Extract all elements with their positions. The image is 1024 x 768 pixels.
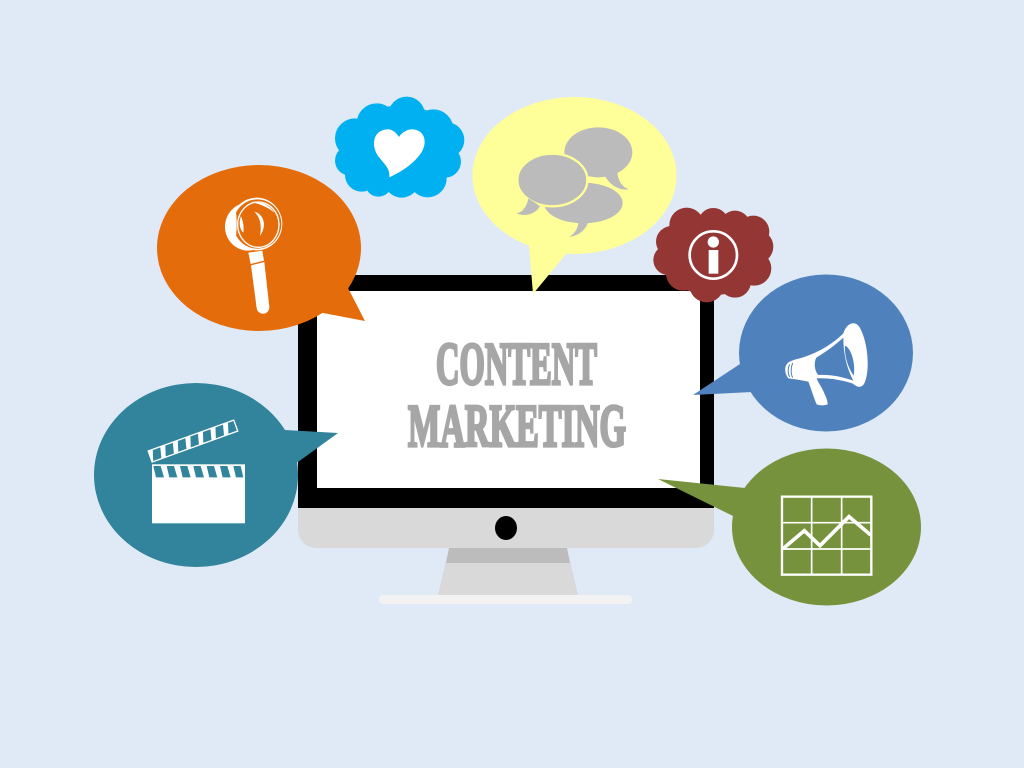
bubble: announcement <box>693 274 913 432</box>
title line: marketing: MARKETING <box>408 393 626 459</box>
bubble: like <box>335 97 464 198</box>
bubble: analytics <box>658 448 921 606</box>
blue cloud <box>335 97 464 198</box>
icon: line chart <box>782 497 871 575</box>
icon: megaphone <box>785 323 868 405</box>
icon: magnifying glass <box>225 198 282 314</box>
icon: heart <box>374 129 425 177</box>
bubble: video <box>94 383 338 567</box>
monitor chin <box>298 500 714 548</box>
orange speech bubble <box>157 165 365 331</box>
icon: chat bubbles <box>517 127 632 237</box>
monitor <box>298 275 714 604</box>
icon: clapperboard <box>147 419 245 523</box>
bubble: information <box>653 208 773 302</box>
blue speech bubble <box>693 274 913 432</box>
stand shadow band <box>446 548 570 563</box>
monitor screen <box>317 291 700 488</box>
bubble: conversation <box>472 97 676 294</box>
icon: info symbol <box>690 231 737 279</box>
monitor bezel <box>298 275 714 508</box>
green speech bubble <box>658 448 921 606</box>
yellow speech bubble <box>472 97 676 294</box>
monitor stand neck <box>438 548 578 595</box>
monitor stand base <box>379 595 632 604</box>
camera dot <box>495 516 517 540</box>
red cloud <box>653 208 773 302</box>
title text <box>408 331 626 459</box>
teal speech bubble <box>94 383 338 567</box>
bubble: search <box>157 165 365 331</box>
title line: content: CONTENT <box>436 331 597 397</box>
